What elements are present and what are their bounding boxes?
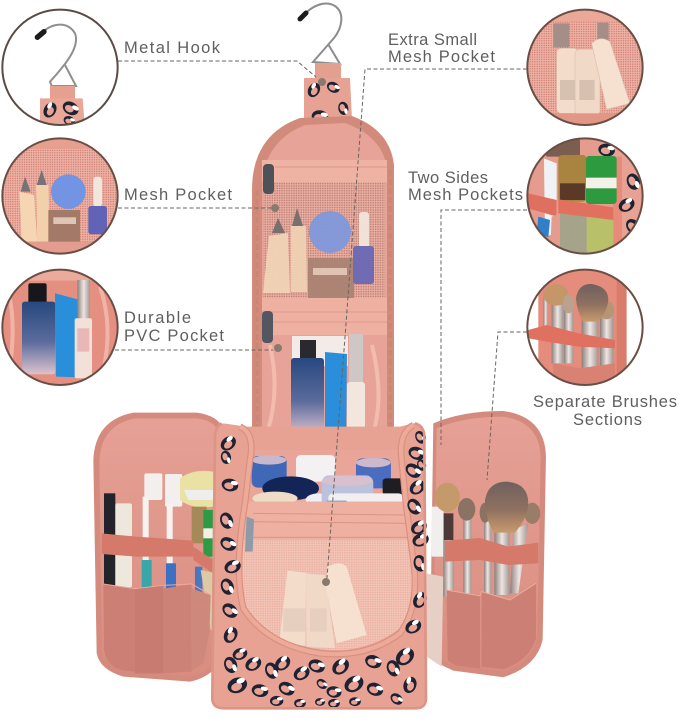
label line two: PVC Pocket: [124, 327, 224, 345]
callout: separate brushes sections: [487, 270, 677, 480]
right side wing with brushes: [427, 411, 546, 677]
leader line: metal hook: [118, 61, 316, 77]
zipper pulls: [262, 164, 274, 343]
circle: side mesh pocket detail: [525, 137, 647, 257]
elastic band right: [445, 538, 538, 565]
leader line: PVC pocket: [115, 349, 273, 351]
callout: two sides mesh pockets: [408, 137, 647, 445]
elastic band left: [102, 533, 193, 557]
label line two: Mesh Pocket: [388, 48, 495, 66]
label: mesh pocket: Mesh Pocket: [124, 186, 232, 204]
callout: durable PVC pocket: [0, 268, 282, 388]
hanging flap: [252, 116, 394, 470]
tubes in pocket: [279, 563, 367, 648]
front mesh pocket: [240, 502, 414, 650]
marker dot: [274, 344, 282, 352]
label: durable PVC pocket: Durable: [124, 309, 191, 327]
interior: [247, 450, 408, 507]
label: extra small: Extra Small: [388, 31, 477, 49]
side mesh right: [427, 573, 443, 667]
flap stitched edge: [257, 170, 390, 460]
label: metal hook: Metal Hook: [124, 39, 221, 57]
label line two: Mesh Pockets: [408, 186, 523, 204]
side mesh left: [201, 570, 217, 633]
mesh pocket: [263, 182, 385, 298]
circle: extra small mesh pocket detail: [525, 8, 645, 128]
toiletries in left wing: [104, 471, 214, 597]
circle: mesh pocket detail: [0, 137, 120, 257]
hanging hook on bag: [300, 4, 341, 64]
circle: metal hook detail: [2, 10, 118, 130]
left side wing with toothbrushes: [93, 413, 220, 682]
marker dot: [322, 578, 330, 586]
leader line: two sides mesh pockets: [441, 210, 527, 445]
leader line: brush sections: [487, 332, 527, 480]
zipper pull front: [245, 517, 254, 552]
leader line: mesh pocket: [118, 207, 272, 209]
leader line: extra small mesh pocket: [327, 69, 527, 578]
label line two: Sections: [573, 411, 642, 429]
callout: mesh pocket: [0, 137, 279, 257]
flap satin lining: [262, 123, 387, 470]
pockets right: [447, 583, 536, 669]
mesh pocket items: [263, 208, 374, 298]
brushes: [435, 482, 540, 597]
white bottle: [432, 507, 444, 557]
pockets left: [103, 584, 211, 673]
leopard print: [218, 429, 431, 708]
interior toiletries: [252, 455, 404, 507]
marker dot: [318, 78, 326, 86]
hanger tab: [304, 63, 352, 124]
circle: brush section detail: [527, 270, 643, 387]
zipper band top: [262, 160, 387, 182]
PVC pocket items: [268, 334, 379, 442]
zipper edge: [239, 425, 415, 654]
bag outer piping: [212, 423, 426, 708]
lower zip band: [262, 298, 387, 335]
label: separate brushes: Separate Brushes: [533, 393, 677, 411]
callout: extra small mesh pocket: [322, 8, 645, 586]
callout: metal hook: [2, 10, 326, 130]
main bag body: [212, 423, 431, 709]
label: two sides: Two Sides: [408, 169, 488, 187]
circle: PVC pocket detail: [0, 268, 120, 388]
marker dot: [271, 204, 279, 212]
